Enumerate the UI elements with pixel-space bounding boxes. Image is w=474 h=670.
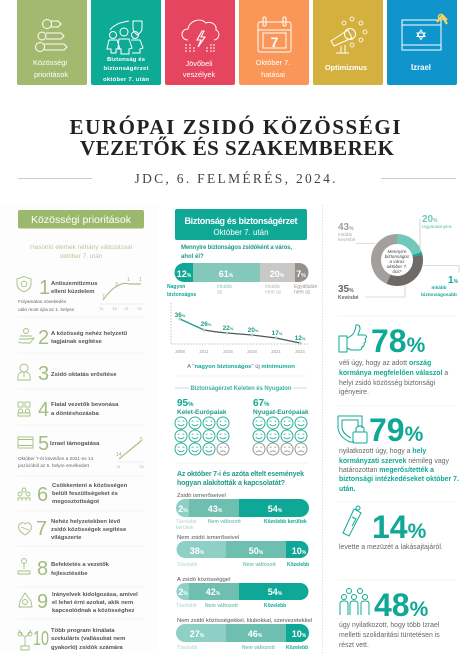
bar: A zsidó közösséggel: 2% [178,587,188,597]
panel: Közösségi prioritások [0,205,158,651]
icon: group of people [340,588,369,615]
icon: mezuzah [343,506,361,536]
bar: Nem zsidó ismerőseivel: Nem változott [243,562,276,568]
priority 1: '18 [112,307,117,311]
priority 4: 4 [38,399,49,421]
priority 2: tagjainak segítése [51,339,102,345]
priority 6: 6 [37,484,48,506]
line chart: nagyon biztonságos: 36% [175,312,186,319]
priority 5: Izrael támogatása [50,441,100,447]
priority 4: a döntéshozásba [51,411,100,417]
navigation tile: Közösségi prioritások: Közösségi [33,58,67,67]
panel: donut chart: óta? [393,269,402,274]
panel intro: október 7. után [60,253,103,260]
stat: 14%: levette a mezüzét a lakásajtajáról. [339,544,443,551]
panel: donut chart: a város [389,259,405,264]
bar: Zsidó ismerőseivel: Távolabb [176,519,197,525]
priority 7: 7 [36,518,47,540]
stacked bar: safety: 12% [177,269,192,279]
panel: Biztonság és biztonságérzet [167,209,318,651]
priority 2: 2 [38,327,49,349]
navigation tile: Jövőbeli veszélyek: Jövőbeli [185,59,213,68]
panel: donut chart: biztonságosabb [421,292,457,297]
priority 1: '11 [99,307,103,311]
navigation tile: Október 7. hatásai: 7 [271,34,279,50]
navigation tile: Biztonság és biztonságérzet: biztonságérzet [104,66,149,72]
line chart: nagyon biztonságos: 17% [272,330,283,337]
priority 9: 9 [37,591,48,613]
stat: 78%: kormánya megfelelően válaszol a [339,370,448,377]
stat: 79%: kormányzati szervek némileg vagy [339,458,449,465]
bar: A zsidó közösséggel: Távolabb [176,603,197,609]
question: relationships [177,471,304,487]
priority 2 [18,327,127,349]
title: EURÓPAI ZSIDÓ KÖZÖSSÉGI [70,115,400,139]
stat: 14% [339,506,443,551]
stat: 48%: úgy nyilatkozott, hogy több Izrael [339,622,440,629]
stat: 78%: 78% [371,323,426,359]
bar: Zsidó ismerőseivel: 54% [268,504,283,514]
bar: Zsidó ismerőseivel: 2% [178,504,188,514]
bar: Nem zsidó közösségekkel [176,618,312,651]
priority 5: 5 [38,433,49,455]
bar: Zsidó ismerőseivel: Zsidó ismerőseivel [177,493,226,499]
line chart: nagyon biztonságos: 2024 [295,349,305,354]
priority 1: Folyamatos növekedés [18,299,67,304]
title: VEZETŐK ÉS SZAKEMBEREK [80,136,395,160]
priority 1: után most újra az 1. helyen [18,307,75,312]
priority 7 [19,518,127,541]
title [70,115,400,160]
priority 10: Több program kínálata [51,628,115,634]
panel: donut chart [338,214,459,301]
chart caption: A "nagyon biztonságos" új minimumon [187,364,295,370]
navigation tile: Közösségi prioritások: prioritások [34,70,68,79]
stat: 48%: 48% [374,587,429,623]
priority 9: kapcsolódnak a közösséghez [52,608,135,614]
panel: donut chart: 20% [422,214,438,225]
priority 1: elleni küzdelem [51,289,95,295]
priority 1: 1 [39,277,50,299]
stat: 79%: után. [339,486,356,493]
stacked bar: safety [167,263,318,298]
smileys: Nyugat-Európaiak 67%: Nyugat-Európaiak [253,409,309,416]
panel intro [30,244,132,260]
panel: donut chart: 1% [448,275,459,286]
stat: 79%: nyilatkozott úgy, hogy a hely [339,448,426,455]
bar: Nem zsidó közösségekkel: Távolabb [177,645,198,651]
bar: Nem zsidó közösségekkel: 46% [248,629,263,639]
priority 9 [19,591,138,614]
bar: Nem zsidó közösségekkel: 10% [292,629,307,639]
panel heading: Biztonság és biztonságérzet [184,216,298,226]
stat: 14%: 14% [372,509,427,545]
panel intro: Hasonló elemek néhány változással [30,244,132,251]
panel: donut chart: Mennyire [388,249,407,254]
line chart: nagyon biztonságos: 2015 [223,349,233,354]
stacked bar: safety: Egyáltalán [294,284,318,290]
line chart: nagyon biztonságos: 26% [201,321,212,328]
smileys: Kelet-Európaiak 95%: 95% [177,398,194,409]
navigation tile: Optimizmus [313,0,383,85]
priority 5: 5 [140,437,143,443]
stacked bar: safety: biztonságos [167,292,196,298]
panel: donut chart: 43% [338,222,354,233]
stacked bar: safety: Inkább [217,284,232,290]
line chart: nagyon biztonságos: 2008 [175,349,185,354]
bar: Zsidó ismerőseivel: Közelebb kerültek [264,519,307,525]
stat: 48%: melletti szolidaritási tüntetésen is [339,632,440,639]
priority 7: Nehéz helyzetekben lévő [51,519,121,525]
stacked bar: safety: 61% [219,269,234,279]
stat: 79%: biztonsági intézkedéseket október 7. [339,476,459,483]
priority 1: '24 [137,307,142,311]
subtitle with rules: JDC, 6. FELMÉRÉS, 2024. [134,171,336,186]
priority 9: el lehet érni azokat, akik nem [52,600,133,606]
panel: donut chart: kevésbé [338,237,356,242]
bar: A zsidó közösséggel: 54% [268,587,283,597]
priority 3: 3 [38,363,49,385]
priority 1: 7 [102,294,105,300]
priority 8: 8 [37,558,48,580]
priority 10 [18,628,125,651]
stat: 48%: részt vett. [339,642,369,649]
stacked bar: safety: nem az [265,290,282,296]
East-West heading: Biztonságérzet Keleten és Nyugaton [190,386,292,392]
priority 5: '24 [139,465,144,469]
bar: Nem zsidó ismerőseivel: 50% [249,546,264,556]
stat: 79%: határozottan megerősítették a [339,467,434,474]
stat: 48% [339,587,440,649]
panel: donut chart: október 7. [387,264,407,269]
stacked bar: safety: Nagyon [167,284,185,290]
question: city safety: ahol él? [181,254,204,260]
question: relationships: Az október 7-i és azóta eltelt események [177,471,304,478]
smileys: Kelet-Európaiak 95% [175,398,229,455]
bar: Nem zsidó ismerőseivel: Nem zsidó ismerőseivel [177,535,239,541]
bar: Nem zsidó közösségekkel: Nem változott [242,645,275,651]
priority 7: zsidó közösségek segítése [51,527,127,533]
bar: Nem zsidó ismerőseivel: Távolabb [177,562,198,568]
bar: Zsidó ismerőseivel: kerültek [176,525,194,531]
priority 6: Csökkenteni a közösségen [52,483,128,489]
stat: 78%: igényeire. [339,389,369,396]
panel: donut chart: biztonságos [385,254,410,259]
navigation tile: Optimizmus: Optimizmus [325,63,367,72]
panel: donut chart: Inkább [338,232,352,237]
priority 2: A közösség nehéz helyzetű [51,331,127,337]
question: relationships: hogyan alakították a kapcsolatát? [177,480,285,487]
smileys: Kelet-Európaiak 95%: Kelet-Európaiak [177,409,227,416]
panel: donut chart: 35% [338,284,354,295]
navigation tile: Izrael: Izrael [411,63,431,72]
priority 8 [18,558,110,580]
panel heading [18,210,144,228]
priority 6 [18,483,128,506]
bar: Zsidó ismerőseivel [176,493,309,531]
priority 8: Befektetés a vezetők [51,562,110,568]
navigation tile: Jövőbeli veszélyek: veszélyek [183,70,216,79]
priority 1: 1 [139,277,142,283]
bar: Nem zsidó közösségekkel: Nem zsidó közösségekkel, klubokkal, szervezetekkel [177,618,312,624]
bar: A zsidó közösséggel [176,577,308,609]
bar: A zsidó közösséggel: Nem változott [205,603,238,609]
stacked bar: safety: az [217,290,223,296]
bar: Nem zsidó közösségekkel: Közelebb [286,645,308,651]
line chart: nagyon biztonságos: 2011 [199,349,209,354]
priority 1: 1 [127,277,130,283]
bar: Nem zsidó ismerőseivel: 10% [292,546,307,556]
bar: Nem zsidó ismerőseivel: 38% [190,546,205,556]
navigation tile: Biztonság és biztonságérzet [91,0,161,85]
bar: Nem zsidó ismerőseivel [177,535,309,568]
navigation tile: Október 7. hatásai [239,0,309,85]
question: city safety [181,245,292,260]
panel heading: Közösségi prioritások [31,214,132,226]
priority 1: '21 [124,307,129,311]
bar: A zsidó közösséggel: Közelebb [264,603,286,609]
stacked bar: safety: nem az [294,290,311,296]
priority 8: fejlesztésébe [51,571,88,577]
smileys: Nyugat-Európaiak 67% [253,398,309,455]
navigation tile: Október 7. hatásai: hatásai [261,70,285,79]
line chart: nagyon biztonságos [171,303,308,354]
bar: Zsidó ismerőseivel: Nem változott [208,519,241,525]
priority 5 [18,433,144,469]
navigation tile: Biztonság és biztonságérzet: Biztonság és [107,57,146,63]
stacked bar: safety: 20% [270,269,285,279]
navigation tile: Jövőbeli veszélyek [165,0,235,85]
bar: Nem zsidó ismerőseivel: Közelebb [287,562,309,568]
priority 7: világszerte [51,535,82,541]
bar: Nem zsidó közösségekkel: 27% [190,629,205,639]
navigation tile: Izrael [387,0,457,85]
icon: thumbs up [339,325,366,352]
stat: 79%: 79% [369,412,424,448]
panel: donut chart: Ugyanannyira [422,224,452,230]
priority 4 [18,399,119,421]
stacked bar: safety: 7% [296,269,306,279]
stat: 78% [339,323,448,396]
stat: 79% [338,412,459,493]
priority 5: Október 7-ét követően a 2021-es 14. [18,456,94,461]
icon: shield with lock [338,416,367,443]
panel heading: Október 7. után [213,228,269,237]
navigation tile: Biztonság és biztonságérzet: október 7. után [103,77,149,83]
priority 6: belüli feszültségeket és [52,491,119,497]
line chart: nagyon biztonságos: 12% [295,335,306,342]
navigation tile: Október 7. hatásai: Október 7. [256,58,290,67]
smileys: Nyugat-Európaiak 67%: 67% [253,398,270,409]
line chart: nagyon biztonságos: 2018 [247,349,257,354]
priority 9: Irányelvek kidolgozása, amivel [52,592,138,598]
question: city safety: Mennyire biztonságos zsidóként a város, [181,245,292,251]
line chart: nagyon biztonságos: 22% [223,325,234,332]
priority 4: Fiatal vezetők bevonása [51,402,119,408]
priority 3: Zsidó oktatás erősítése [51,372,117,378]
bar: A zsidó közösséggel: A zsidó közösséggel [177,577,230,583]
priority 10: 10 [33,628,49,650]
bar: A zsidó közösséggel: 42% [206,587,221,597]
priority 5: '21 [116,465,121,469]
priority 10: szekuláris (vallásukat nem [51,636,125,642]
priority 1 [17,276,143,312]
panel heading [175,209,307,240]
priority 5: 14 [116,452,122,458]
priority 6: megosztottságot [52,499,99,505]
priority 3 [18,363,117,385]
stat: 78%: véli úgy, hogy az adott ország [339,360,431,367]
stacked bar: safety: Inkább [265,284,280,290]
line chart: nagyon biztonságos: 20% [248,327,259,334]
priority 5: pozícióból az 5. helyre emelkedett [18,463,90,468]
panel: donut chart: Kevésbé [338,295,359,301]
priority 1: 3 [115,282,118,288]
priority 1: Antiszemitizmus [51,281,98,287]
navigation tile: Közösségi prioritások [17,0,87,85]
priority 10: gyakorló) zsidók számára [51,645,123,651]
panel: donut chart: Inkább [431,285,447,290]
bar: Zsidó ismerőseivel: 43% [208,504,223,514]
stat: 78%: helyi zsidó közösség biztonsági [339,380,436,387]
line chart: nagyon biztonságos: 2021 [271,349,281,354]
